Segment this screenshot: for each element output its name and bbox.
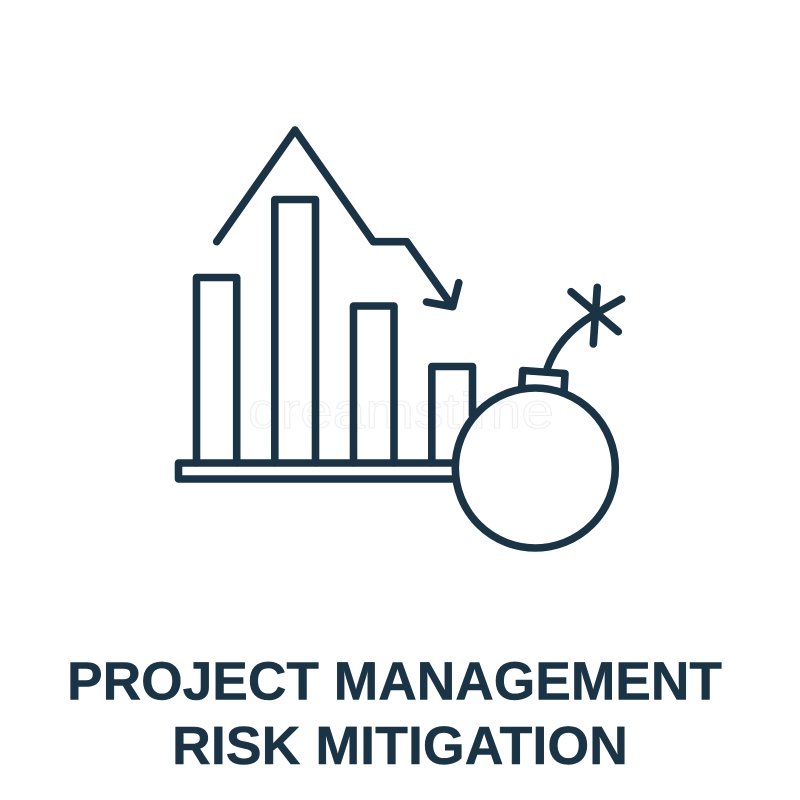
icon: risk chart with bomb <box>178 130 622 548</box>
falling trend arrow <box>217 130 459 307</box>
title: risk mitigation: RISK MITIGATION <box>172 716 628 776</box>
bar 1 <box>196 278 237 463</box>
bar 4 <box>432 366 472 463</box>
chart baseline <box>178 463 453 479</box>
fuse spark <box>571 287 622 344</box>
bomb fuse <box>547 315 593 368</box>
watermark: dreamstime <box>248 383 554 439</box>
title: project management: PROJECT MANAGEMENT <box>67 652 722 712</box>
bomb body <box>455 388 615 548</box>
bomb cap <box>522 370 565 392</box>
bar 3 <box>354 306 394 463</box>
bar 2 <box>275 200 316 463</box>
